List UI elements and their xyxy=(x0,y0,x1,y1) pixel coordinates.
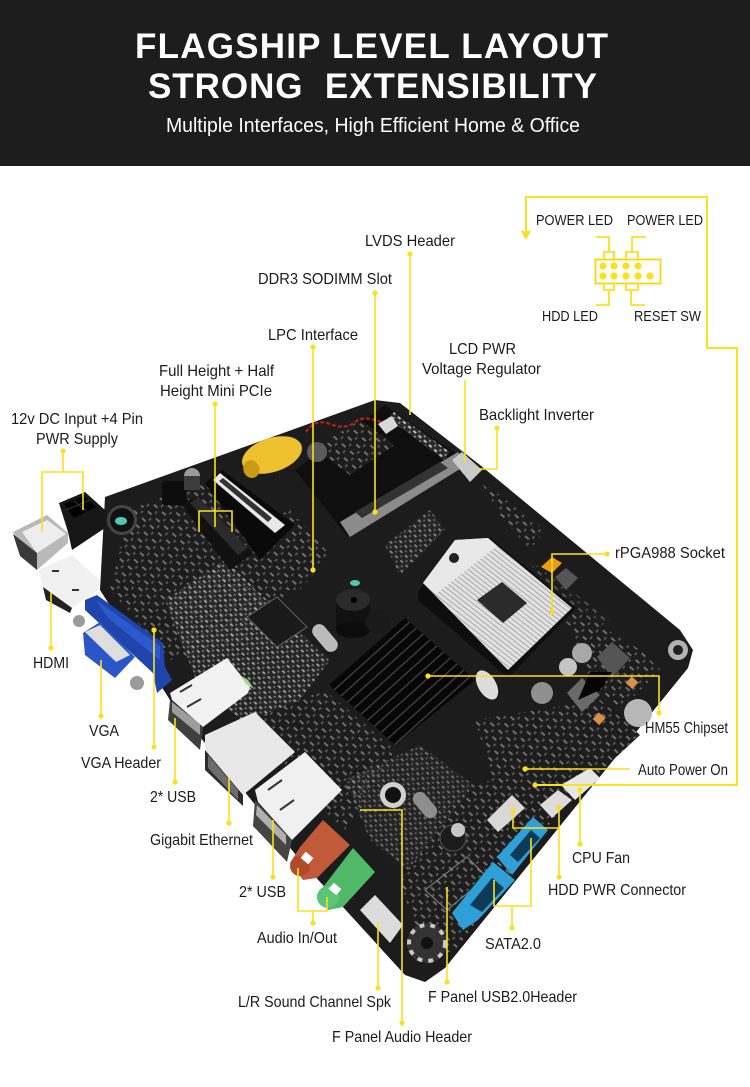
label: F Panel Audio Header: F Panel Audio Header xyxy=(332,1029,473,1046)
speaker connector xyxy=(360,895,403,943)
label: SATA2.0: SATA2.0 xyxy=(485,936,541,953)
label: Audio In/Out: Audio In/Out xyxy=(257,930,337,947)
board PCB xyxy=(100,400,693,982)
DC power jack xyxy=(13,515,68,570)
corner screw hole xyxy=(407,923,447,963)
label: POWER LED right: POWER LED xyxy=(627,212,703,229)
4 pin power connector xyxy=(59,492,105,550)
leader lines xyxy=(42,251,662,1026)
SODIMM slot xyxy=(295,405,468,537)
audio jacks xyxy=(290,820,375,910)
label: POWER LED left: POWER LED xyxy=(536,212,613,229)
label: Full Height + Half Height Mini PCIe: Height Mini PCIe xyxy=(160,383,272,400)
lower USB port stack xyxy=(253,752,342,862)
front USB header xyxy=(425,857,487,910)
pin diagram xyxy=(596,237,660,305)
label: RESET SW: RESET SW xyxy=(634,308,702,325)
subtitle: Multiple Interfaces, High Efficient Home & Office xyxy=(166,115,580,137)
header banner xyxy=(0,0,750,166)
right white connector xyxy=(452,452,482,482)
small white connector top xyxy=(378,416,398,434)
title line 1: FLAGSHIP LEVEL LAYOUT xyxy=(135,27,608,66)
inductor by socket xyxy=(555,568,578,590)
mounting hole with teal mark xyxy=(107,505,137,535)
crystal and capacitor lower xyxy=(410,789,466,851)
Gigabit Ethernet port xyxy=(205,712,295,806)
label: 2* USB left: 2* USB xyxy=(150,789,196,806)
label: HDD LED: HDD LED xyxy=(542,308,598,325)
label: rPGA988 Socket: rPGA988 Socket xyxy=(615,545,726,562)
HDMI port xyxy=(38,555,100,613)
label: F Panel USB2.0Header: F Panel USB2.0Header xyxy=(428,989,578,1006)
SATA ports xyxy=(452,817,548,930)
CPU socket xyxy=(418,538,576,678)
battery side capacitor xyxy=(307,442,327,462)
small white connectors xyxy=(487,768,600,832)
label: HM55 Chipset: HM55 Chipset xyxy=(645,720,728,737)
label: Full Height + Half Height Mini PCIe: Full Height + Half xyxy=(159,363,275,380)
label: 12v DC Input +4 Pin PWR Supply: PWR Supply xyxy=(36,431,118,448)
label: Backlight Inverter: Backlight Inverter xyxy=(479,407,595,424)
VGA port xyxy=(73,595,172,693)
label: VGA Header: VGA Header xyxy=(81,755,162,772)
upper USB port stack xyxy=(168,658,254,750)
label: Gigabit Ethernet: Gigabit Ethernet xyxy=(150,832,253,849)
leader: outer loop to front panel pin diagram xyxy=(526,197,737,785)
label: HDD PWR Connector: HDD PWR Connector xyxy=(548,882,687,899)
CMOS battery holder xyxy=(236,429,307,481)
main chip xyxy=(247,597,307,647)
choke and capacitor xyxy=(162,468,200,505)
label: DDR3 SODIMM Slot: DDR3 SODIMM Slot xyxy=(258,271,393,288)
PCB trace textures xyxy=(110,440,660,960)
title line 2: STRONG EXTENSIBILITY xyxy=(148,67,597,106)
label: CPU Fan: CPU Fan xyxy=(572,850,630,867)
chipset heatsink xyxy=(329,618,475,745)
label: LPC Interface: LPC Interface xyxy=(268,327,358,344)
power section components xyxy=(471,640,688,727)
label: 2* USB right: 2* USB xyxy=(239,884,286,901)
label: LVDS Header: LVDS Header xyxy=(365,233,456,250)
motherboard photo illustration xyxy=(13,400,693,982)
labels xyxy=(11,212,728,1046)
label: Auto Power On: Auto Power On xyxy=(638,762,728,779)
label: 12v DC Input +4 Pin PWR Supply: 12v DC Input +4 Pin xyxy=(11,411,143,428)
label: LCD PWR Voltage Regulator: Voltage Regulator xyxy=(422,361,542,378)
LVDS header pins xyxy=(388,412,450,460)
round mark xyxy=(380,782,406,808)
label: L/R Sound Channel Spk: L/R Sound Channel Spk xyxy=(238,994,392,1011)
label: HDMI: HDMI xyxy=(33,655,69,672)
label: LCD PWR Voltage Regulator: LCD PWR xyxy=(449,341,516,358)
crystal xyxy=(309,621,341,655)
buzzer and capacitors xyxy=(336,580,390,638)
orange capacitor xyxy=(541,557,562,573)
arrow head xyxy=(521,231,531,240)
mini PCIe slots xyxy=(180,470,295,570)
label: VGA: VGA xyxy=(89,723,119,740)
red and black wires xyxy=(306,418,385,432)
